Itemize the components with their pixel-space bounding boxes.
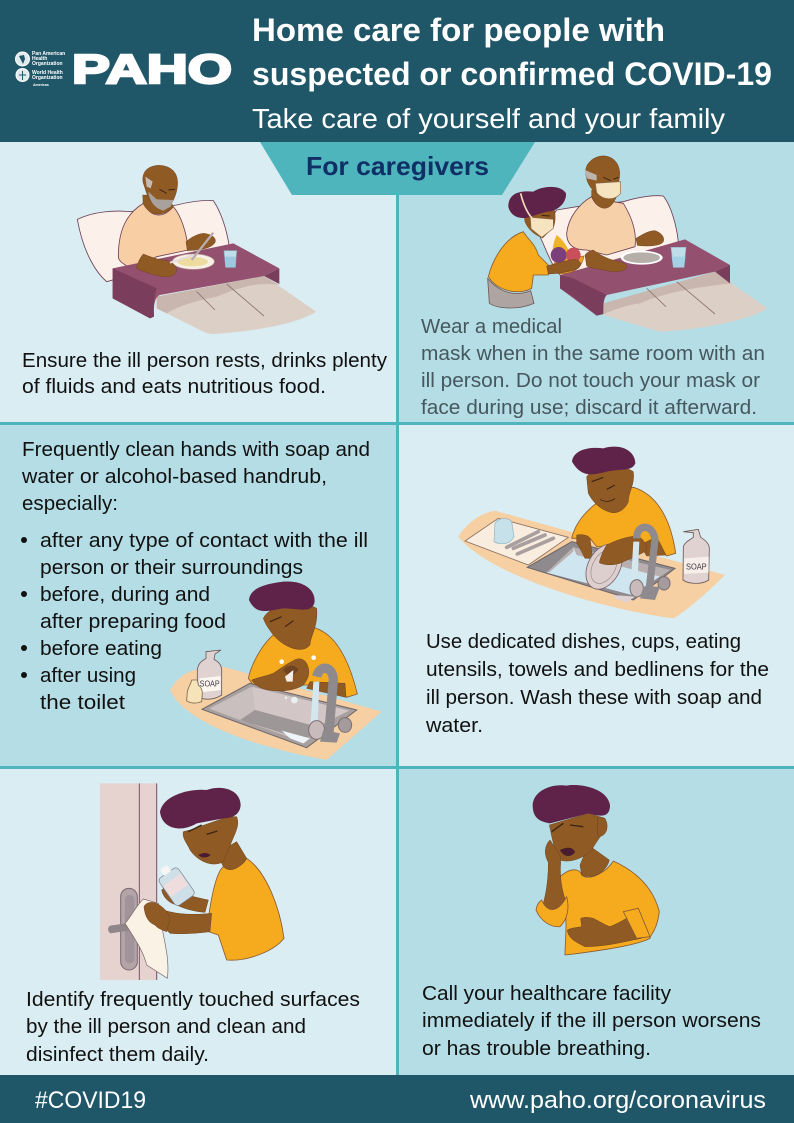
- caption: dedicated dishes: water.: [425, 715, 483, 737]
- text: hand hygiene instructions: the toilet: [40, 692, 125, 714]
- caption: clean surfaces: disinfect them daily.: [26, 1044, 209, 1066]
- caption: call healthcare facility: [422, 983, 761, 1060]
- subtitle: Take care of yourself and your family: [252, 103, 725, 134]
- text: hand hygiene instructions: before eating: [40, 638, 162, 660]
- illustration: person washing dishes: SOAP: [686, 561, 707, 571]
- caption: dedicated dishes: ill person. Wash these with soap and: [426, 687, 762, 709]
- illustration: man eating in bed: [77, 165, 316, 334]
- logo: PAHO: Organization: [32, 75, 63, 81]
- logo: PAHO: Organization: [32, 61, 63, 67]
- caption: clean surfaces: Identify frequently touched surfaces: [26, 989, 360, 1011]
- panel: dedicated dishes: [397, 423, 794, 768]
- caption: wear medical mask: Wear a medical: [421, 316, 562, 338]
- website: www.paho.org/coronavirus: [469, 1087, 766, 1114]
- caption: ensure rest: Ensure the ill person rests, drinks plenty: [22, 350, 387, 372]
- illustration: person on the phone: [533, 785, 659, 955]
- header: [0, 0, 794, 142]
- logo: PAHO: Pan American: [32, 51, 65, 57]
- illustration: person disinfecting door handle: [100, 783, 284, 980]
- caption: ensure rest: [22, 350, 387, 398]
- illustration: caregiver with mask bringing food: [488, 156, 767, 332]
- logo: PAHO: Health: [32, 56, 47, 62]
- banner: for caregivers: [260, 142, 535, 195]
- text: hand hygiene instructions: person or their surroundings: [40, 557, 303, 579]
- title: [252, 12, 772, 92]
- caption: wear medical mask: mask when in the same room with an: [421, 343, 765, 365]
- text: hand hygiene instructions: water or alcohol-based handrub,: [21, 466, 327, 488]
- logo: PAHO: World Health: [32, 70, 63, 76]
- illustration: person washing hands at sink: SOAP: [200, 679, 220, 689]
- title: Home care for people with: [252, 12, 665, 48]
- logo: PAHO: [16, 46, 232, 92]
- panel: clean surfaces: [0, 768, 397, 1076]
- caption: call healthcare facility: or has trouble breathing.: [422, 1038, 651, 1060]
- caption: wear medical mask: ill person. Do not touch your mask or: [421, 370, 760, 392]
- text: hand hygiene instructions: after any type of contact with the ill: [40, 530, 368, 552]
- logo: PAHO: PAHO: [72, 46, 232, 92]
- hashtag: #COVID19: [35, 1087, 146, 1114]
- illustration: person washing dishes: [458, 447, 725, 618]
- caption: dedicated dishes: utensils, towels and bedlinens for the: [426, 659, 769, 681]
- caption: dedicated dishes: [425, 631, 769, 737]
- illustration: person washing hands at sink: [170, 581, 382, 760]
- panel: call healthcare facility: [397, 768, 794, 1076]
- text: hand hygiene instructions: before, during and: [40, 584, 210, 606]
- logo: PAHO: Americas: [33, 83, 49, 87]
- caption: ensure rest: of fluids and eats nutritious food.: [22, 376, 326, 398]
- banner: for caregivers: For caregivers: [306, 151, 489, 181]
- caption: call healthcare facility: immediately if the ill person worsens: [422, 1010, 761, 1032]
- text: hand hygiene instructions: after preparing food: [40, 611, 226, 633]
- text: hand hygiene instructions: [21, 439, 370, 714]
- caption: clean surfaces: by the ill person and clean and: [26, 1016, 306, 1038]
- caption: clean surfaces: [26, 989, 360, 1066]
- footer: [0, 1075, 794, 1123]
- panel: wear medical mask: [397, 141, 794, 423]
- text: hand hygiene instructions: especially:: [22, 493, 118, 515]
- caption: wear medical mask: [421, 316, 765, 419]
- panel: ensure rest: [0, 141, 397, 423]
- caption: wear medical mask: face during use; discard it afterward.: [421, 397, 757, 419]
- panel: clean hands: [0, 423, 397, 768]
- title: suspected or confirmed COVID-19: [252, 56, 772, 92]
- caption: call healthcare facility: Call your healthcare facility: [422, 983, 671, 1005]
- text: hand hygiene instructions: after using: [40, 665, 136, 687]
- caption: dedicated dishes: Use dedicated dishes, cups, eating: [426, 631, 741, 653]
- text: hand hygiene instructions: Frequently clean hands with soap and: [22, 439, 370, 461]
